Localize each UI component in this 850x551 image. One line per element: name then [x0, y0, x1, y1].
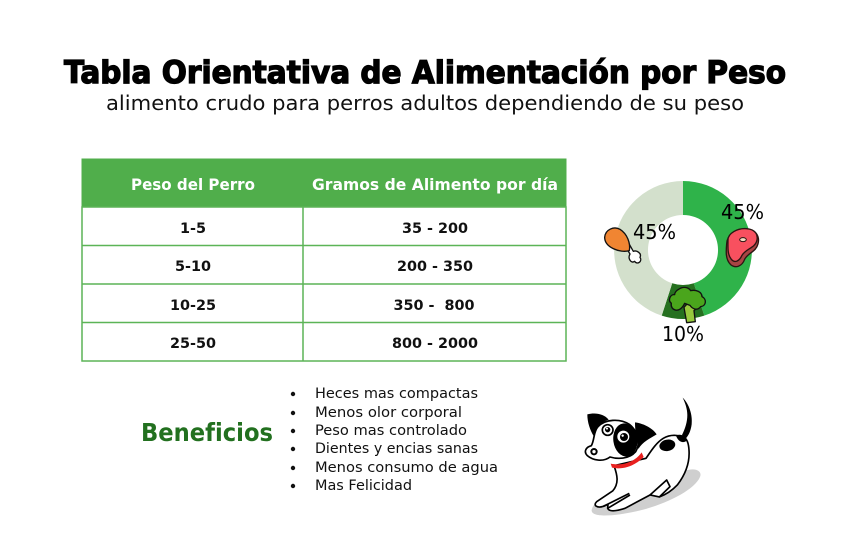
- dog eye patch: [611, 422, 640, 458]
- item: controlled weight: Peso mas controlado: [315, 423, 467, 439]
- dog tail: [682, 398, 692, 439]
- row 1: 1-5: [180, 221, 206, 237]
- dog left ear: [587, 413, 609, 437]
- row 4: 25-50: [170, 336, 216, 352]
- illustration: dog: [585, 398, 701, 516]
- item: less body odor: Menos olor corporal: [315, 405, 462, 421]
- feeding table: [82, 158, 566, 361]
- row 3: 10-25: [170, 298, 216, 314]
- dog legs: [603, 480, 670, 508]
- dog head: [585, 420, 638, 460]
- dog shadow: [592, 469, 701, 516]
- dog back spot: [658, 438, 676, 453]
- dog collar: [611, 452, 644, 468]
- row 2: 5-10: [175, 259, 211, 275]
- label: chicken 45%: 45%: [633, 220, 676, 244]
- dog tail spot: [676, 435, 687, 442]
- row 3: 350 - 800: [393, 298, 475, 314]
- dog body: [595, 435, 689, 511]
- label: vegetables 10%: 10%: [662, 322, 704, 346]
- item: less water use: Menos consumo de agua: [315, 460, 498, 476]
- dog left eye: [602, 425, 613, 435]
- item: compact stools: Heces mas compactas: [315, 386, 478, 402]
- icon: chicken leg: [605, 228, 641, 263]
- table header background: [82, 158, 566, 208]
- subtitle: alimento crudo para perros adultos dependiendo de su peso: [106, 91, 744, 115]
- row 4: [170, 336, 478, 352]
- row 1: [180, 221, 468, 237]
- dog right eye: [617, 431, 629, 443]
- row 4: 800 - 2000: [392, 336, 478, 352]
- benefits heading: Beneficios: [141, 418, 273, 447]
- segment: chicken 45%: [614, 181, 683, 316]
- dog nose: [590, 448, 598, 455]
- item: more happiness: Mas Felicidad: [315, 478, 412, 494]
- title: Tabla Orientativa de Alimentación por Peso: [64, 55, 786, 91]
- row 1: 35 - 200: [402, 221, 468, 237]
- header: dog weight: Peso del Perro: [131, 175, 255, 194]
- icon: broccoli: [670, 287, 705, 323]
- dog right ear: [635, 422, 657, 449]
- benefits list: [291, 386, 498, 494]
- row 2: [175, 259, 473, 275]
- label: meat 45%: 45%: [721, 200, 764, 224]
- table grid: [82, 207, 566, 361]
- row 3: [170, 298, 475, 314]
- icon: steak: [726, 229, 758, 267]
- segment: meat 45%: [683, 181, 752, 316]
- donut chart: [605, 181, 764, 346]
- header: grams of food per day: Gramos de Alimento por día: [312, 175, 558, 194]
- segment: vegetables 10%: [662, 283, 704, 319]
- item: healthy teeth and gums: Dientes y encias sanas: [315, 441, 478, 457]
- row 2: 200 - 350: [397, 259, 473, 275]
